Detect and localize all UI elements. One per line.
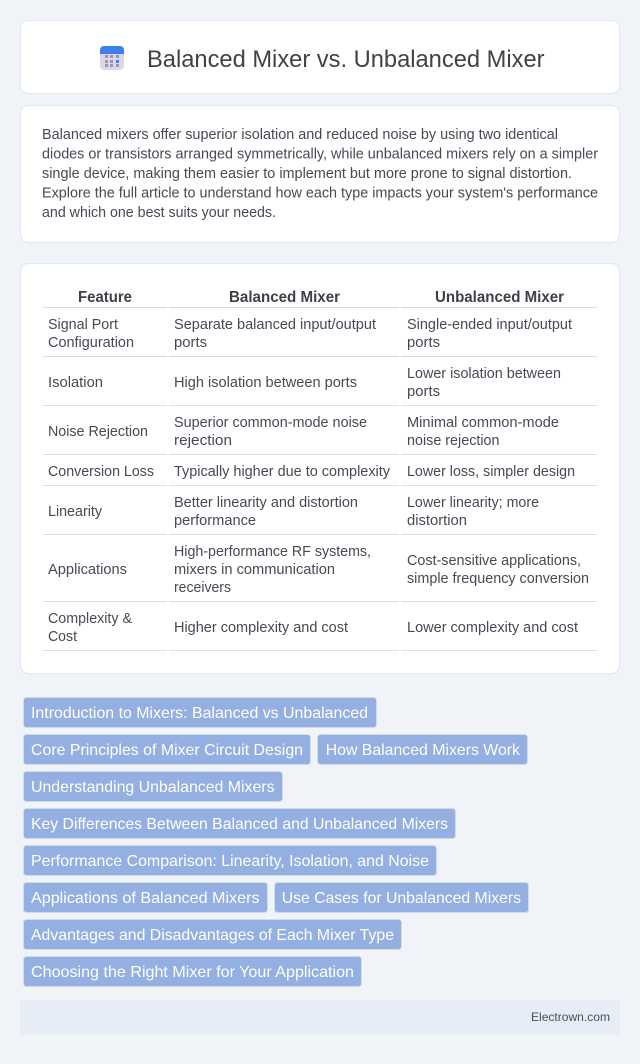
row: conversion loss	[43, 464, 597, 486]
row: complexity and cost: Lower complexity and cost	[407, 620, 578, 636]
intro text block	[42, 127, 598, 221]
panel: comparison table	[20, 264, 620, 674]
row: linearity: Linearity	[48, 504, 103, 520]
row: signal port configuration: Single-ended input/output	[407, 317, 572, 333]
row: noise rejection: rejection	[174, 433, 232, 449]
intro text block: Balanced mixers offer superior isolation and reduced noise by using two identical	[42, 127, 558, 143]
row: linearity	[43, 495, 597, 535]
row: isolation: Isolation	[48, 375, 103, 391]
row: linearity: performance	[174, 513, 256, 529]
row: conversion loss: Lower loss, simpler design	[407, 464, 575, 480]
table header row: Feature	[78, 289, 132, 306]
chip: use cases: Use Cases for Unbalanced Mixers	[282, 890, 521, 907]
chip: choosing	[24, 956, 362, 986]
row: linearity: distortion	[407, 513, 467, 529]
chip: core principles	[24, 734, 310, 764]
row: linearity: Lower linearity; more	[407, 495, 539, 511]
chip: key differences	[24, 808, 456, 838]
row: complexity and cost: Higher complexity and cost	[174, 620, 348, 636]
row: noise rejection: Minimal common-mode	[407, 415, 559, 431]
row: applications: mixers in communication	[174, 562, 335, 578]
row: conversion loss: Conversion Loss	[48, 464, 154, 480]
row: signal port configuration: Signal Port	[48, 317, 118, 333]
row: applications: High-performance RF systems,	[174, 544, 371, 560]
row: noise rejection	[43, 415, 597, 455]
row: applications: receivers	[174, 580, 231, 596]
footer source text: Electrown.com	[531, 1010, 610, 1024]
intro text block: single device, making them easier to implement but more prone to signal distortion.	[42, 166, 572, 182]
chip: understanding unbalanced: Understanding Unbalanced Mixers	[31, 779, 274, 796]
chip: how balanced mixers work	[318, 734, 528, 764]
row: isolation: ports	[407, 384, 440, 400]
row: signal port configuration	[43, 317, 597, 357]
panel: header	[20, 20, 620, 94]
chip: performance comparison	[24, 846, 436, 876]
chip: how balanced mixers work: How Balanced Mixers Work	[326, 742, 521, 759]
footer	[20, 1000, 620, 1034]
row: complexity and cost	[43, 611, 597, 651]
row: isolation	[43, 366, 597, 406]
table header row: Balanced Mixer	[229, 289, 340, 306]
row: applications: Applications	[48, 562, 127, 578]
chip: introduction: Introduction to Mixers: Balanced vs Unbalanced	[31, 705, 368, 722]
row: noise rejection: noise rejection	[407, 433, 500, 449]
title: Balanced Mixer vs. Unbalanced Mixer	[147, 46, 545, 73]
table header row	[43, 289, 597, 308]
chip: use cases	[274, 882, 528, 912]
row: applications: simple frequency conversion	[407, 571, 589, 587]
row: signal port configuration: ports	[407, 335, 440, 351]
row: signal port configuration: Configuration	[48, 335, 134, 351]
chip: introduction	[24, 698, 376, 728]
chip: advantages	[24, 920, 402, 950]
row: complexity and cost: Cost	[48, 629, 77, 645]
intro text block: diodes or transistors arranged symmetrically, while unbalanced mixers rely on a simpler	[42, 146, 598, 162]
topic chips	[24, 698, 528, 986]
row: applications	[43, 544, 597, 602]
row: signal port configuration: Separate balanced input/output	[174, 317, 376, 333]
intro text block: Explore the full article to understand how each type impacts your system's performance	[42, 186, 598, 202]
chip: core principles: Core Principles of Mixer Circuit Design	[31, 742, 303, 759]
chip: choosing: Choosing the Right Mixer for Your Application	[31, 964, 354, 981]
chip: advantages: Advantages and Disadvantages of Each Mixer Type	[31, 927, 394, 944]
table header row: Unbalanced Mixer	[435, 289, 564, 306]
chip: performance comparison: Performance Comparison: Linearity, Isolation, and Noise	[31, 853, 429, 870]
row: noise rejection: Noise Rejection	[48, 424, 148, 440]
panel: introduction	[20, 106, 620, 242]
row: noise rejection: Superior common-mode noise	[174, 415, 367, 431]
chip: understanding unbalanced	[24, 772, 282, 802]
chip: key differences: Key Differences Between Balanced and Unbalanced Mixers	[31, 816, 448, 833]
row: conversion loss: Typically higher due to complexity	[174, 464, 391, 480]
row: isolation: Lower isolation between	[407, 366, 561, 382]
chip: applications: Applications of Balanced Mixers	[31, 890, 260, 907]
row: signal port configuration: ports	[174, 335, 207, 351]
row: complexity and cost: Complexity &	[48, 611, 132, 627]
row: isolation: High isolation between ports	[174, 375, 357, 391]
row: applications: Cost-sensitive applications,	[407, 553, 581, 569]
chip: applications	[24, 882, 268, 912]
intro text block: and which one best suits your needs.	[42, 205, 276, 221]
row: linearity: Better linearity and distortion	[174, 495, 358, 511]
icon: calendar	[100, 46, 124, 70]
